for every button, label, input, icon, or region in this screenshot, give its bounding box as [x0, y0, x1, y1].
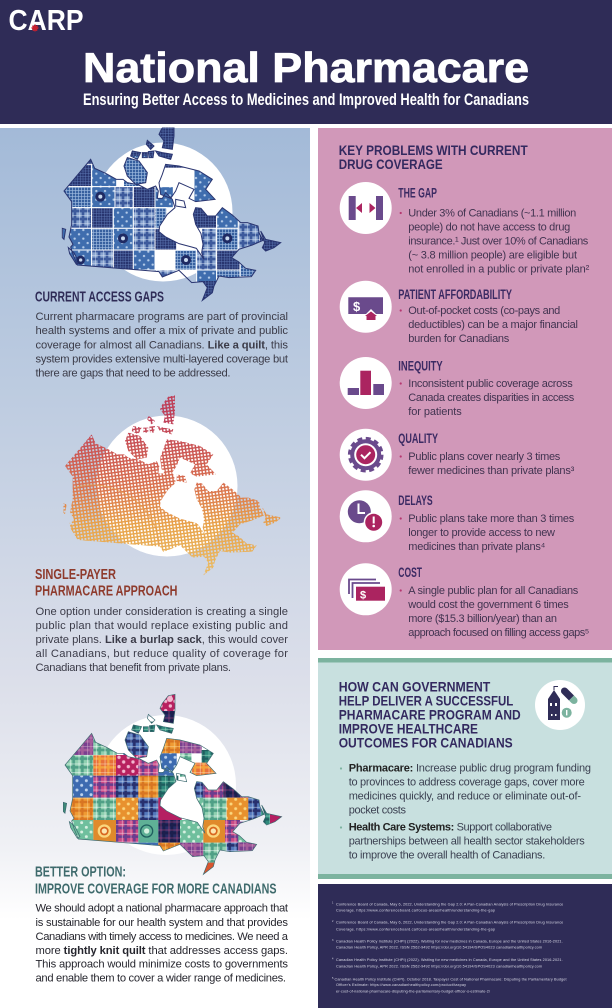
panel: footnotes: er-cost-of-national-pharmacare-disputing-the-parliamentary-budget-officer-s-estimate-2/	[336, 989, 491, 993]
title: National Pharmacare	[83, 44, 529, 91]
logo: CARP: CARP	[8, 5, 84, 37]
panel: footnotes: 2	[332, 920, 334, 923]
item: the gap: not enrolled in a public or private plan²	[408, 264, 590, 276]
item: the gap: Under 3% of Canadians (~1.1 million	[408, 208, 576, 220]
item: quality: QUALITY	[398, 431, 438, 446]
text block: current access gaps: Current pharmacare programs are part of provincial	[36, 311, 288, 323]
heading: how can government help: PHARMACARE PROGRAM AND	[339, 707, 521, 723]
bullet list: recommendations: Health Care Systems: Support collaborative	[349, 822, 552, 834]
panel: footnotes: Coverage. https://www.conferenceboard.ca/focus-areas/health/understanding-the-gap	[336, 908, 495, 912]
item: quality: Public plans cover nearly 3 times	[408, 451, 561, 463]
item: delays: medicines than private plans⁴	[408, 541, 546, 553]
map: burlap sack	[50, 393, 283, 579]
item: the gap: people) do not have access to drug	[408, 222, 570, 234]
text block: single-payer approach	[36, 606, 288, 674]
bullet list: recommendations: to improve the overall health of Canadians.	[349, 850, 545, 862]
text block: current access gaps: there are gaps that need to be addressed.	[36, 367, 230, 379]
heading: key problems: DRUG COVERAGE	[339, 156, 443, 172]
item: delays: Public plans take more than 3 times	[408, 513, 575, 525]
item: delays: DELAYS	[398, 493, 433, 508]
heading: key problems: KEY PROBLEMS WITH CURRENT	[339, 142, 528, 158]
item: the gap: THE GAP	[398, 185, 437, 200]
heading: single-payer approach: SINGLE-PAYER	[35, 566, 116, 583]
bullet list: recommendations: Pharmacare: Increase public drug program funding	[349, 763, 591, 775]
heading: better option	[35, 864, 276, 897]
text block: current access gaps: health systems and offer a mix of private and public	[36, 325, 288, 337]
panel: footnotes: 1	[332, 902, 334, 904]
text block: current access gaps: system provides extensive multi-layered coverage but	[36, 353, 289, 365]
text block: better option: Canadians with timely access to medicines. We need a	[36, 931, 289, 943]
heading: single-payer approach: PHARMACARE APPROACH	[35, 583, 178, 600]
text block: current access gaps	[36, 311, 289, 379]
panel: footnotes	[318, 884, 612, 1008]
item: cost: COST	[398, 565, 422, 580]
item: patient affordability: $	[353, 299, 361, 314]
bullet list: recommendations: to provinces to address coverage gaps, cover more	[349, 777, 585, 789]
item: patient affordability: burden for Canadians	[408, 333, 510, 345]
icon: parliament and pill	[535, 680, 585, 730]
item: quality: fewer medicines than private plans³	[408, 465, 575, 477]
heading: better option: IMPROVE COVERAGE FOR MORE CANADIANS	[35, 880, 276, 897]
item: inequity: Canada creates disparities in access	[408, 392, 575, 404]
item: delays	[340, 490, 575, 553]
heading: single-payer approach	[35, 566, 178, 600]
heading: how can government help: IMPROVE HEALTHCARE	[339, 721, 478, 737]
map: quilt with gaps (blue)	[62, 128, 282, 302]
panel: footnotes: Canadian Health Policy Institute (CHPI) (2022). Waiting for new medicines in Canada, Europe and the United States 2016-2021.	[336, 940, 563, 944]
text block: single-payer approach: private plans. Like a burlap sack, this would cover	[36, 634, 288, 646]
bullet list: recommendations: pocket costs	[349, 805, 406, 817]
panel: footnotes: Coverage. https://www.conferenceboard.ca/focus-areas/health/understanding-the-gap	[336, 927, 495, 931]
item: inequity: INEQUITY	[398, 359, 443, 374]
panel: footnotes: 5	[332, 977, 334, 980]
heading: better option: BETTER OPTION:	[35, 864, 126, 881]
item: delays: longer to provide access to new	[408, 527, 555, 539]
item: cost: approach focused on filling access gaps⁵	[408, 627, 589, 639]
text block: current access gaps: coverage for almost all Canadians. Like a quilt, this	[36, 339, 288, 351]
panel: left background	[0, 128, 310, 1008]
heading: key problems	[339, 142, 528, 172]
text block: single-payer approach: public plan that would replace existing public and	[36, 620, 288, 632]
text block: better option: We should adopt a national pharmacare approach that	[36, 903, 289, 915]
panel: key problems	[318, 128, 612, 650]
item: quality	[340, 429, 575, 481]
map: tightly knit quilt	[60, 692, 283, 876]
item: inequity: Inconsistent public coverage across	[408, 378, 573, 390]
item: patient affordability: deductibles) can be a major financial	[408, 319, 578, 331]
item: cost: A single public plan for all Canadians	[408, 585, 579, 597]
item: cost: more ($15.3 billion/year) than an	[408, 613, 557, 625]
heading: how can government help	[339, 679, 521, 751]
text block: better option: and enable them to cover a wider range of medicines.	[36, 973, 286, 985]
item: inequity	[340, 357, 575, 418]
text block: better option: more tightly knit quilt that addresses access gaps.	[36, 945, 288, 957]
heading: how can government help: OUTCOMES FOR CANADIANS	[339, 735, 513, 751]
panel: header band	[0, 0, 612, 124]
heading: current access gaps: CURRENT ACCESS GAPS	[35, 289, 164, 306]
panel: footnotes: 4	[332, 957, 334, 960]
text block: single-payer approach: One option under consideration is creating a single	[36, 606, 288, 618]
text block: better option	[36, 903, 289, 985]
panel: footnotes: Officer's Estimate: https://www.canadianhealthpolicy.com/product/taxpay	[336, 983, 466, 987]
text block: single-payer approach: Canadians that benefit from private plans.	[36, 662, 231, 674]
text block: single-payer approach: all Canadians, but reduce quality of coverage for	[36, 648, 288, 660]
item: patient affordability	[340, 281, 578, 345]
heading: how can government help: HOW CAN GOVERNMENT	[339, 679, 491, 695]
item: inequity: for patients	[408, 406, 462, 418]
bullet list: recommendations: medicines quickly, and reduce or eliminate out-of-	[349, 791, 581, 803]
item: patient affordability: Out-of-pocket costs (co-pays and	[408, 305, 560, 317]
text block: better option: is sustainable for our health system and that provides	[36, 917, 288, 929]
heading: how can government help: HELP DELIVER A SUCCESSFUL	[339, 693, 514, 709]
item: cost: would cost the government 6 times	[407, 599, 569, 611]
bullet list: recommendations	[340, 763, 591, 862]
panel: footnotes: Canadian Health Policy, APR 2022. ISSN 2562-9492 https://doi.org/10.54194/SPOS4023 canadianhealthpolicy.com	[336, 964, 542, 968]
item: cost	[340, 563, 589, 639]
bullet list: recommendations: partnerships between all health sector stakeholders	[349, 836, 585, 848]
panel: footnotes: 3	[332, 939, 334, 942]
text block: better option: This approach would minimize costs to governments	[36, 959, 288, 971]
panel: footnotes: Canadian Health Policy, APR 2022. ISSN 2562-9492 https://doi.org/10.54194/SPOS4023 canadianhealthpolicy.com	[336, 946, 542, 950]
item: patient affordability: PATIENT AFFORDABILITY	[398, 287, 512, 302]
item: the gap: (~ 3.8 million people) are eligible but	[408, 250, 577, 262]
panel: footnotes: Conference Board of Canada, May 6, 2022, Understanding the Gap 2.0: A Pan-Canadian Analysis of Prescription Drug Insurance	[336, 921, 563, 925]
panel: footnotes: Canadian Health Policy Institute (CHPI) (2022). Waiting for new medicines in Canada, Europe and the United States 2016-2021.	[336, 958, 563, 962]
panel: footnotes: Canadian Health Policy Institute (CHPI). October 2018. Taxpayer Cost of National Pharmacare: Disputing the Parliamentary Budget	[334, 977, 567, 981]
panel: how can government help	[318, 658, 612, 879]
item: the gap: insurance.¹ Just over 10% of Canadians	[408, 236, 589, 248]
panel: footnotes: Conference Board of Canada, May 6, 2022, Understanding the Gap 2.0: A Pan-Canadian Analysis of Prescription Drug Insurance	[336, 902, 563, 906]
item: cost: $	[360, 590, 366, 602]
item: the gap	[340, 182, 590, 276]
